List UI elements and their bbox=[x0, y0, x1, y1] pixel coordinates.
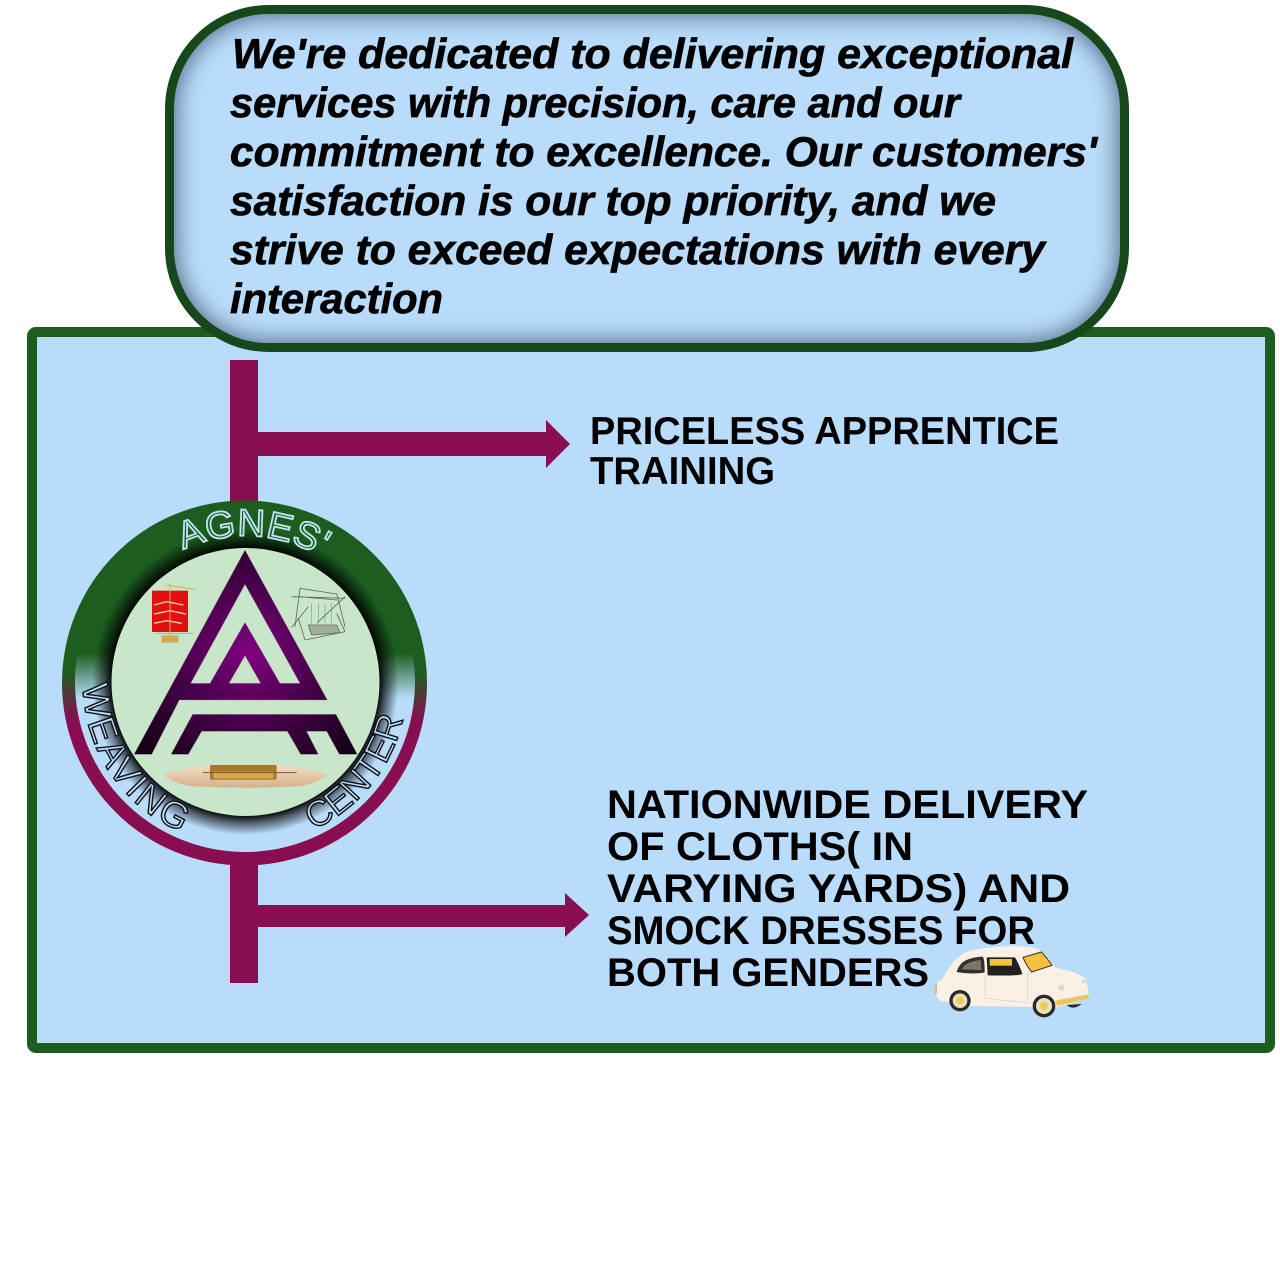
inner shadow bbox=[92, 529, 398, 835]
text: apprentice training bbox=[590, 410, 1059, 493]
arrow: to apprentice training bbox=[258, 420, 570, 468]
text: nationwide delivery: SMOCK DRESSES FOR bbox=[607, 909, 1035, 953]
centre disc bbox=[112, 548, 380, 816]
outer ring bbox=[62, 500, 427, 866]
arrow: to nationwide delivery bbox=[258, 893, 589, 937]
callout text: interaction bbox=[230, 275, 443, 322]
icon: white car bbox=[934, 946, 1089, 1018]
callout: mission statement bbox=[165, 5, 1129, 352]
text: apprentice training: TRAINING bbox=[590, 450, 775, 493]
ring text: CENTER: CENTER bbox=[306, 714, 404, 826]
text: nationwide delivery: OF CLOTHS( IN bbox=[607, 825, 913, 869]
logo monogram: lower A bbox=[171, 714, 357, 754]
inner band bbox=[75, 512, 415, 852]
artwork in disc bbox=[134, 550, 357, 788]
callout text: We're dedicated to delivering exceptional bbox=[232, 30, 1074, 77]
icon: red woven textile bbox=[152, 583, 195, 643]
text: apprentice training: PRICELESS APPRENTICE bbox=[590, 410, 1059, 453]
vertical connector line bbox=[230, 360, 258, 983]
icon: weaving shuttle bbox=[163, 765, 327, 788]
ring text: AGNES': AGNES' bbox=[182, 508, 333, 551]
callout text bbox=[230, 30, 1099, 322]
callout text: satisfaction is our top priority, and we bbox=[230, 177, 996, 224]
callout text: commitment to excellence. Our customers' bbox=[230, 128, 1099, 175]
callout text: services with precision, care and our bbox=[230, 79, 963, 126]
logo monogram: upper A bbox=[134, 550, 327, 754]
text: nationwide delivery: NATIONWIDE DELIVERY bbox=[607, 783, 1088, 827]
text: nationwide delivery: BOTH GENDERS bbox=[607, 951, 929, 995]
text: nationwide delivery: VARYING YARDS) AND bbox=[607, 867, 1070, 911]
callout text: strive to exceed expectations with every bbox=[230, 226, 1048, 273]
text: nationwide delivery bbox=[607, 783, 1088, 995]
icon: loom sketch bbox=[292, 588, 345, 640]
ring text: WEAVING: WEAVING bbox=[82, 681, 188, 829]
panel: services background bbox=[27, 327, 1275, 1053]
